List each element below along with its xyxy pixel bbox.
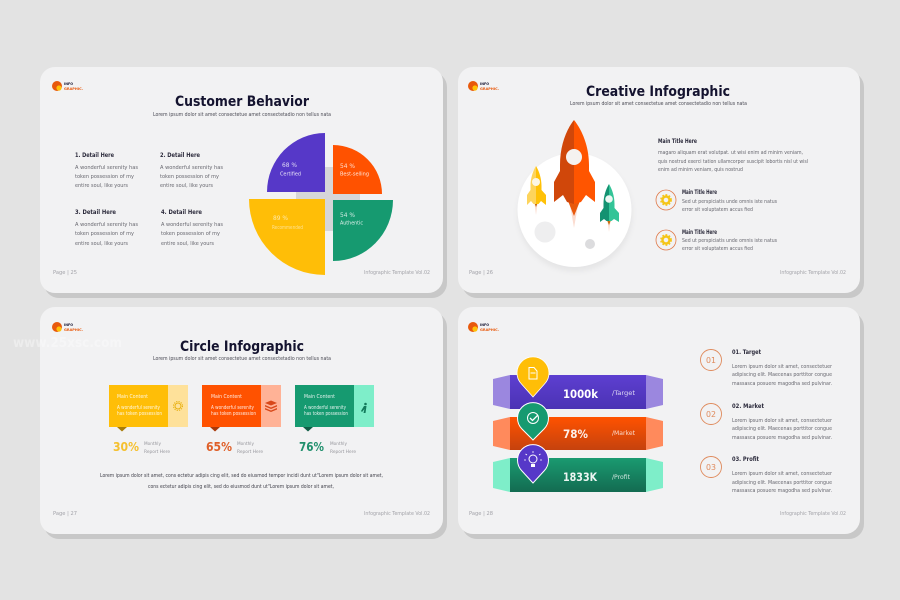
detail 1 bbox=[75, 152, 138, 189]
logo: INFO bbox=[64, 82, 73, 86]
logo: GRAPHIC. bbox=[480, 328, 499, 332]
detail 4: 4. Detail Here bbox=[161, 209, 202, 216]
badge: 01 bbox=[700, 350, 722, 370]
text: profit: Lorem ipsum dolor sit amet, consectetuer bbox=[732, 471, 833, 477]
big rocket bbox=[554, 120, 595, 228]
logo: INFO bbox=[480, 323, 489, 327]
badge: 02: 02 bbox=[706, 410, 716, 419]
watermark: www.25xsc.com bbox=[13, 336, 122, 351]
panel: customer behavior bbox=[40, 67, 447, 298]
text block: main title: Main Title Here bbox=[658, 138, 697, 145]
text: profit: massasca posuere magodha sed pulvinar. bbox=[732, 488, 832, 494]
card: green content bbox=[295, 385, 374, 432]
text: target: Lorem ipsum dolor sit amet, consectetuer bbox=[732, 364, 833, 370]
subtitle: Lorem ipsum dolor sit amet consectetue amet consectetadio non tellus nata bbox=[153, 356, 331, 362]
subtitle: Lorem ipsum dolor sit amet consectetue amet consectetadio non tellus nata bbox=[570, 101, 747, 107]
logo: GRAPHIC. bbox=[64, 87, 83, 91]
item: second feature: Main Title Here bbox=[682, 229, 717, 236]
item: first feature: error sit voluptatem accus fied bbox=[682, 207, 753, 213]
segment: certified: 68 % bbox=[282, 161, 297, 169]
band: profit: 1833K bbox=[563, 470, 598, 484]
text: market: adipiscing elit. Maecenas porttitor congue bbox=[732, 426, 832, 432]
band: target: /Target bbox=[612, 390, 636, 397]
stat: 30 percent: 30% bbox=[113, 439, 139, 454]
detail 3: 3. Detail Here bbox=[75, 209, 116, 216]
icon: gear 2 bbox=[656, 230, 676, 250]
detail 4: token possession of my bbox=[161, 231, 220, 237]
segment: certified: Certified bbox=[280, 172, 301, 178]
pin: check on green bbox=[518, 403, 548, 440]
stat: 65 percent: Report Here bbox=[237, 449, 263, 455]
detail 1: A wonderful serenity has bbox=[75, 165, 138, 171]
detail 3: token possession of my bbox=[75, 231, 134, 237]
badge: 02 bbox=[700, 404, 722, 424]
text block: main title: enim ad minim veniam, quis nostrud bbox=[658, 167, 743, 173]
logo bbox=[52, 81, 83, 91]
pin: document on yellow bbox=[517, 357, 549, 397]
band: market: 78% bbox=[563, 427, 588, 441]
logo: INFO bbox=[480, 82, 489, 86]
page number: Page | 26 bbox=[469, 270, 493, 276]
icon: figure bbox=[361, 403, 367, 413]
item: first feature: Main Title Here bbox=[682, 189, 717, 196]
stat: 76 percent: Report Here bbox=[330, 449, 356, 455]
text block: main title: quis nostrud exerci tation ullamcorper suscipit lobortis nisl ut wisl bbox=[658, 159, 808, 165]
item: first feature: Sed ut perspiciatis unde omnis iste natus bbox=[682, 199, 777, 205]
footer note: Infographic Template Vol.02 bbox=[780, 270, 846, 276]
text: profit bbox=[732, 455, 833, 494]
body paragraph bbox=[100, 473, 383, 490]
segment: best-selling bbox=[333, 145, 382, 194]
text: profit: 03. Profit bbox=[732, 455, 759, 463]
text: target: adipiscing elit. Maecenas porttitor congue bbox=[732, 372, 832, 378]
card: orange content: has token possession bbox=[211, 411, 256, 417]
item: second feature: Sed ut perspiciatis unde omnis iste natus bbox=[682, 238, 777, 244]
segment: best-selling: Best-selling bbox=[340, 172, 369, 178]
band: market bbox=[493, 417, 663, 450]
card: green content: Main Content bbox=[304, 394, 335, 400]
stat: 65 percent: 65% bbox=[206, 439, 232, 454]
panel: target market profit bbox=[458, 307, 864, 539]
body paragraph: cons ectetur adipis cing elit, sed do eiusmod dunt ut"Lorem ipsum dolor sit amet, bbox=[148, 484, 334, 490]
stat: 65 percent bbox=[206, 439, 263, 455]
detail 4: A wonderful serenity has bbox=[161, 222, 223, 228]
text: market: massasca posuere magodha sed pulvinar. bbox=[732, 435, 832, 441]
item: second feature bbox=[682, 229, 777, 252]
band: profit bbox=[493, 458, 663, 492]
stat: 76 percent: 76% bbox=[299, 439, 324, 454]
body paragraph: Lorem ipsum dolor sit amet, cons ectetur adipis cing elit, sed do eiusmod tempor incidi dunt ut"Lorem ipsum dolor sit amet, bbox=[100, 473, 383, 479]
pie chart bbox=[249, 133, 393, 275]
band: target bbox=[493, 375, 663, 409]
heading: Customer Behavior bbox=[175, 94, 309, 110]
logo: INFO bbox=[64, 323, 73, 327]
card: green content: A wonderful serenity bbox=[304, 405, 346, 411]
badge: 01: 01 bbox=[706, 356, 716, 365]
card: orange content: A wonderful serenity bbox=[211, 405, 254, 411]
logo bbox=[52, 322, 83, 332]
detail 2: entire soul, like yours bbox=[160, 183, 213, 189]
detail 4 bbox=[161, 209, 223, 247]
pin: light bulb on purple bbox=[518, 445, 548, 483]
item: second feature: error sit voluptatem accus fied bbox=[682, 246, 753, 252]
text: target bbox=[732, 348, 833, 387]
detail 4: entire soul, like yours bbox=[161, 241, 214, 247]
subtitle: Lorem ipsum dolor sit amet consectetue amet consectetadio non tellus nata bbox=[153, 112, 331, 118]
text: market: 02. Market bbox=[732, 402, 764, 410]
panel: circle infographic bbox=[40, 307, 447, 539]
card: yellow content: A wonderful serenity bbox=[117, 405, 160, 411]
stat: 76 percent bbox=[299, 439, 356, 455]
band: profit: /Profit bbox=[612, 474, 631, 481]
detail 2: 2. Detail Here bbox=[160, 152, 200, 159]
footer note: Infographic Template Vol.02 bbox=[364, 511, 430, 517]
stat: 76 percent: Monthly bbox=[330, 441, 347, 447]
card: orange content: Main Content bbox=[211, 394, 242, 400]
badge: 03: 03 bbox=[706, 463, 716, 472]
detail 2: token possession of my bbox=[160, 174, 219, 180]
badge: 03 bbox=[700, 456, 722, 478]
heading: Creative Infographic bbox=[586, 84, 730, 100]
text: target: 01. Target bbox=[732, 348, 761, 356]
footer note: Infographic Template Vol.02 bbox=[364, 270, 430, 276]
stat: 30 percent: Monthly bbox=[144, 441, 161, 447]
segment: best-selling: 54 % bbox=[340, 162, 355, 170]
band: market: /Market bbox=[612, 430, 636, 437]
text: market bbox=[732, 402, 833, 441]
card: orange content bbox=[202, 385, 281, 432]
page number: Page | 28 bbox=[469, 511, 493, 517]
detail 1: 1. Detail Here bbox=[75, 152, 114, 159]
segment: authentic bbox=[333, 200, 393, 261]
segment: authentic: Authentic bbox=[340, 220, 363, 226]
green rocket bbox=[600, 184, 619, 232]
logo bbox=[468, 81, 499, 91]
text block: main title bbox=[658, 138, 808, 173]
segment: recommended: 89 % bbox=[273, 214, 288, 222]
heading: Circle Infographic bbox=[180, 339, 304, 355]
segment: certified bbox=[267, 133, 325, 192]
stat: 30 percent: Report Here bbox=[144, 449, 170, 455]
card: yellow content: has token possession bbox=[117, 411, 162, 417]
stat: 65 percent: Monthly bbox=[237, 441, 254, 447]
moon bbox=[518, 153, 632, 271]
card: yellow content bbox=[109, 385, 188, 432]
logo: GRAPHIC. bbox=[480, 87, 499, 91]
icon: sun bbox=[174, 402, 182, 410]
page number: Page | 27 bbox=[53, 511, 77, 517]
card: green content: has token possession bbox=[304, 411, 348, 417]
segment: authentic: 54 % bbox=[340, 211, 355, 219]
detail 2: A wonderful serenity has bbox=[160, 165, 223, 171]
detail 3: entire soul, like yours bbox=[75, 241, 128, 247]
logo bbox=[468, 322, 499, 332]
icon: layers bbox=[265, 400, 277, 412]
panel: creative infographic bbox=[458, 67, 864, 298]
illustration: rockets over moon bbox=[518, 120, 632, 271]
detail 3 bbox=[75, 209, 138, 247]
band: target: 1000k bbox=[563, 387, 598, 401]
stat: 30 percent bbox=[113, 439, 170, 455]
detail 3: A wonderful serenity has bbox=[75, 222, 138, 228]
page number: Page | 25 bbox=[53, 270, 77, 276]
yellow rocket bbox=[527, 166, 546, 215]
card: yellow content: Main Content bbox=[117, 394, 148, 400]
text block: main title: magaro aliquam erat volutpat. ut wisi enim ad minim veniam, bbox=[658, 150, 803, 156]
item: first feature bbox=[682, 189, 777, 213]
detail 1: token possession of my bbox=[75, 174, 134, 180]
text: market: Lorem ipsum dolor sit amet, consectetuer bbox=[732, 418, 833, 424]
detail 2 bbox=[160, 152, 223, 189]
segment: recommended: Recommended bbox=[272, 225, 303, 231]
detail 1: entire soul, like yours bbox=[75, 183, 128, 189]
footer note: Infographic Template Vol.02 bbox=[780, 511, 846, 517]
logo: GRAPHIC. bbox=[64, 328, 83, 332]
segment: recommended bbox=[249, 199, 325, 275]
text: target: massasca posuere magodha sed pulvinar. bbox=[732, 381, 832, 387]
text: profit: adipiscing elit. Maecenas porttitor congue bbox=[732, 480, 832, 486]
icon: gear 1 bbox=[656, 190, 676, 210]
